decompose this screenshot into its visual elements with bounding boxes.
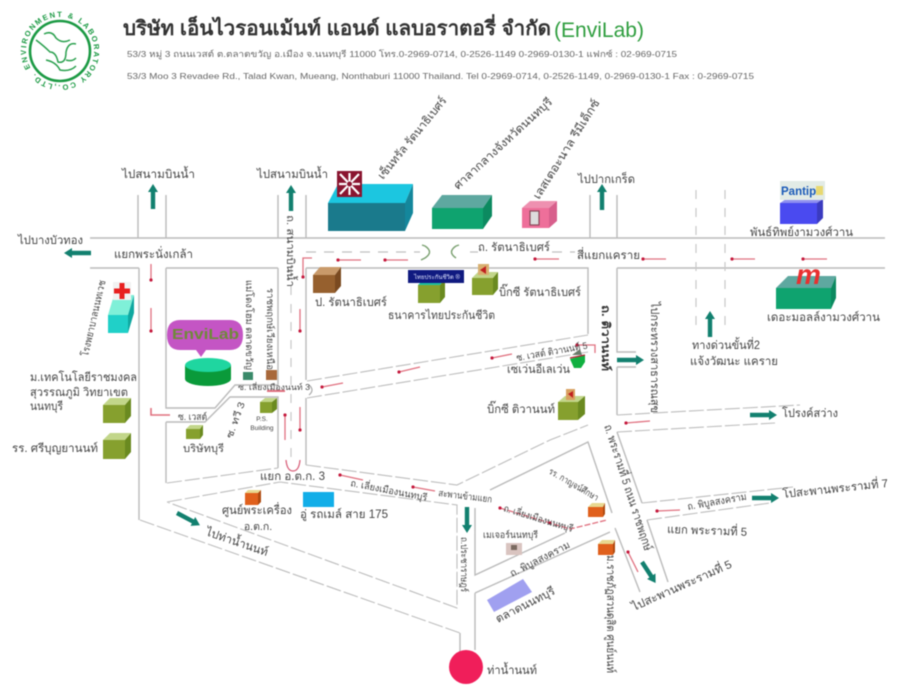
map labels: ทางด่วนขั้นที่2 (692, 337, 760, 352)
map labels: ท่าน้ำนนท์ (487, 662, 537, 677)
icon: EnviLab building (185, 358, 231, 386)
rotated labels (78, 93, 889, 626)
rotated labels: ตลาดนนทบุรี (493, 585, 557, 626)
map labels: อ.ต.ก. (244, 521, 272, 533)
map labels: ซ. เลี่ยงเมืองนนท์ 3 (238, 381, 311, 392)
EnviLab callout: EnviLab (172, 326, 239, 343)
rotated labels: ไปสะพานพระรามที่ 5 (628, 556, 734, 614)
building: school orange (588, 503, 605, 517)
building: 7-Eleven (570, 349, 585, 368)
map labels: นนทบุรี (30, 400, 63, 413)
building: Big C Tiwanon (558, 389, 585, 420)
address Thai: 53/3 หมู่ 3 ถนนเวสต์ ต.ตลาดขวัญ อ.เมือง จ.นนทบุรี 11000 โทร.0-2969-0714, 0-2526-1149 0-2969-0130-1 แฟกซ์ : 02-969-0715 (127, 49, 677, 60)
map labels: แยก พระรามที่ 5 (667, 521, 747, 539)
EnviLab callout (167, 320, 243, 357)
map labels: เมเจอร์นนทบุรี (483, 529, 538, 541)
rotated labels: โปสะพานพระรามที่ 7 (782, 475, 889, 501)
small teal building (243, 372, 253, 380)
map labels: บิ๊กซี ติวานนท์ (487, 400, 555, 416)
building: bank with sign (408, 270, 464, 303)
building: amulet centre (245, 490, 261, 505)
map labels: อู่ รถเมล์ สาย 175 (300, 507, 388, 521)
building: Major Nonthaburi (506, 543, 522, 555)
vertical road labels: แม่โดงโฮม ตลาดขวัญ (243, 280, 255, 370)
building: The Mall: m (796, 259, 821, 290)
building: university (103, 398, 131, 423)
Nonthaburi market (487, 579, 532, 612)
vertical road labels: ราชพฤกษ์เวียงเหนือ (264, 288, 276, 370)
rotated labels: ไปท่าน้ำนนท์ (203, 523, 270, 559)
u-turn marks (286, 245, 459, 471)
header title: EnviLab: (EnviLab) (554, 19, 644, 42)
rotated labels: ถ. เลี่ยงเมืองนนทบุรี (349, 476, 428, 504)
map labels: แยกพระนั่งเกล้า (114, 246, 193, 261)
building: P.S. (260, 398, 277, 413)
building: school (103, 433, 131, 459)
rotated labels: เซ็นทรัล รัตนาธิเบศร์ (374, 93, 450, 182)
vertical road labels: ไปกระทรวงสาธารณสุข (648, 301, 661, 413)
map labels: สี่แยกแคราย (577, 247, 640, 262)
building: brown PO (313, 267, 341, 293)
map labels: ไปสนามบินน้ำ (121, 166, 195, 181)
map labels: ธนาคารไทยประกันชีวิต (388, 309, 495, 322)
rotated labels: ถ. พิบูลสงคราม (508, 540, 572, 580)
red traffic direction arrows (149, 257, 827, 572)
building: Big C Rattanathibet (472, 264, 498, 295)
map labels: โปรงค์สว่าง (782, 406, 838, 420)
building: provincial hall (432, 195, 492, 229)
map labels: รร. ศรีบุญยานนท์ (12, 441, 98, 455)
building: hospital (108, 282, 134, 333)
rotated labels: ซ. เวสต์ ติวานนท์ 5 (515, 340, 588, 364)
building: pink (522, 201, 557, 228)
vertical road labels (243, 215, 661, 673)
map labels: Building (250, 425, 274, 432)
bus depot (303, 492, 334, 507)
map labels: ซ. เวสต์ (178, 411, 207, 423)
map labels: P.S. (256, 416, 268, 423)
vertical road labels: ถ. ติวานนท์ (599, 305, 613, 371)
map labels: เซเว่นอีเลเว่น (507, 363, 570, 376)
address English: 53/3 Moo 3 Revadee Rd., Talad Kwan, Mueang, Nonthaburi 11000 Thailand. Tel 0-2969-0714, 0-2526-1149, 0-2969-0130-1 Fax : 0-2969-0715 (127, 71, 754, 81)
Tha Nam Non circle (449, 650, 483, 684)
rotated labels: ถ. พิบูลสงคราม (687, 492, 748, 513)
map labels: ศูนย์พระเครื่อง (222, 502, 292, 517)
map labels: แจ้งวัฒนะ แคราย (690, 355, 778, 368)
vertical road labels: ถ.ประชาราษฎร์ (458, 537, 470, 592)
map labels (12, 166, 880, 677)
rotated labels: ศาลากลางจังหวัดนนทบุรี (451, 95, 555, 192)
building: bank with sign: ไทยประกันชีวิต ® (413, 273, 460, 281)
building: Pantip (780, 181, 825, 224)
small brown building (266, 370, 277, 380)
map labels: แยก อ.ต.ก. 3 (260, 471, 325, 483)
vertical road labels: ถ. สนามบินน้ำ (284, 215, 298, 287)
header title: บริษัท เอ็นไวรอนเม้นท์ แอนด์ แลบอราตอรี่ จำกัด (123, 13, 551, 40)
map labels: ถ. รัตนาธิเบศร์ (478, 240, 550, 254)
map labels: บริษัทบุรี (183, 442, 224, 455)
map labels: พันธ์ทิพย์งามวงศ์วาน (750, 225, 853, 239)
map labels: ไปสนามบินน้ำ (256, 166, 328, 181)
building: Pantip: Pantip (781, 186, 816, 198)
map labels: ป. รัตนาธิเบศร์ (315, 295, 387, 309)
building: Central Rattanathibet (328, 171, 413, 231)
map labels: บิ๊กซี รัตนาธิเบศร์ (499, 283, 581, 299)
rotated labels: โรงพยาบาลนนทเวช (78, 279, 109, 358)
map labels: สุวรรณภูมิ วิทยาเขต (30, 386, 128, 399)
rotated labels: ถ. เลี่ยงเมืองนนทบุรี (502, 501, 575, 535)
map labels: ไปปากเกร็ด (577, 171, 635, 186)
building: university orange (598, 540, 615, 555)
rotated labels: รร. กาญจน์ศึกษา (547, 465, 601, 503)
building: Brithip (186, 425, 203, 439)
map labels: เดอะมอลล์งามวงศ์วาน (767, 310, 880, 324)
map labels: ม.เทคโนโลยีราชมงคล (30, 370, 137, 384)
teal direction arrows (64, 184, 779, 586)
vertical road labels: ม.ราชภัฏสวนดุสิต ศูนย์นนท์ (604, 555, 618, 673)
vertical road labels: ถ. พระรามที่ 5 ถนน ราชพฤกษ์ (601, 422, 656, 553)
company logo: ENVIRONMENT & LABORATORY CO.,LTD. (20, 10, 100, 91)
road network (90, 190, 885, 655)
rotated labels: ซ. ทวี 3 (224, 400, 248, 440)
building: The Mall (776, 259, 836, 309)
rotated labels: เลสเตอะนาล รีมีเด็กซ์ (529, 96, 603, 202)
rotated labels: สะพานข้ามแยก (438, 488, 493, 506)
map labels: ไปบางบัวทอง (17, 234, 83, 247)
